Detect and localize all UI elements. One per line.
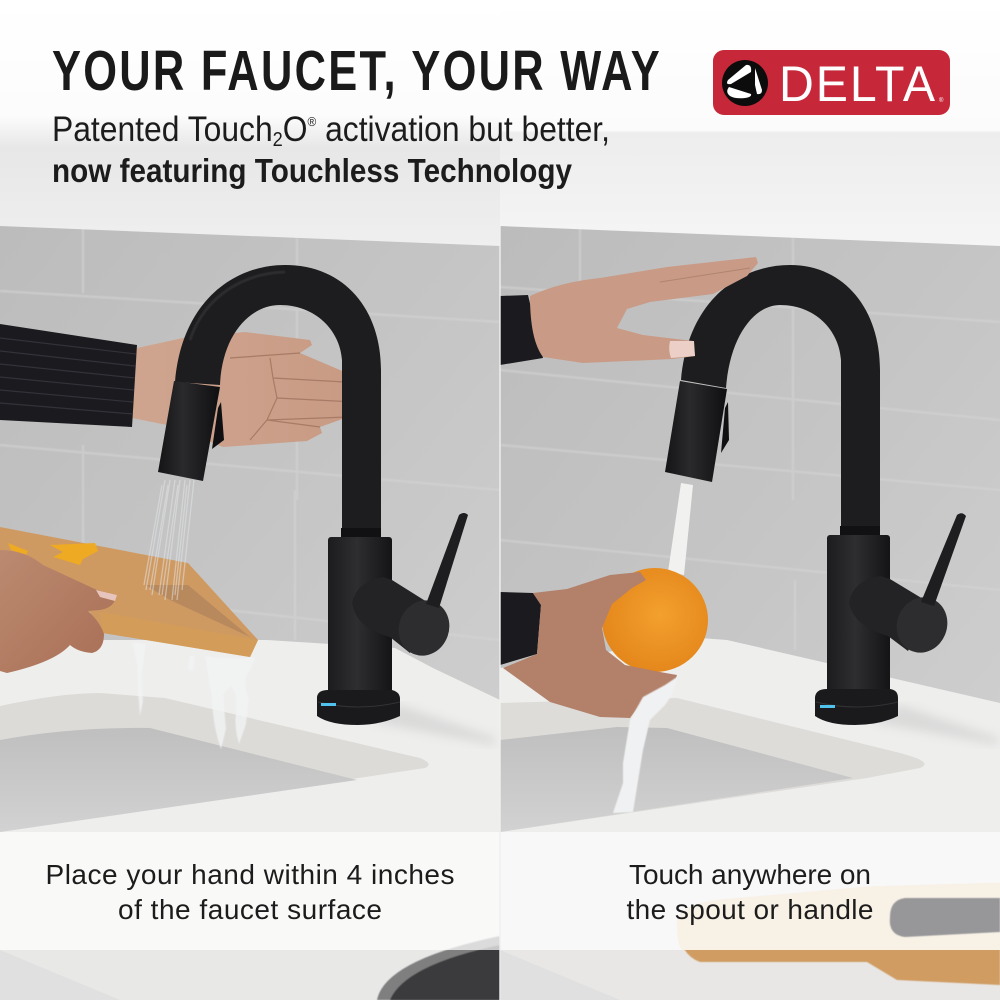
sink basin: [0, 728, 357, 832]
water drips: [132, 642, 255, 749]
base disk: [815, 689, 898, 725]
spray head: [158, 381, 220, 481]
water falling from orange: [613, 677, 677, 813]
counter: [0, 640, 500, 840]
caption band: [0, 832, 1000, 950]
spout: [175, 265, 381, 537]
faucet body: [827, 535, 890, 693]
subtitle: Patented Touch: [52, 110, 295, 149]
sink rim: [500, 698, 924, 832]
lower hand holding orange: [500, 572, 677, 718]
nail: [96, 590, 117, 601]
faucet base shadow: [870, 705, 998, 745]
finger creases: [230, 353, 355, 440]
sink basin: [500, 727, 853, 832]
title: YOUR FAUCET, YOUR WAY: [52, 39, 662, 103]
subtitle: now featuring Touchless Technology: [52, 152, 573, 189]
sleeve: [0, 324, 137, 427]
base disk: [317, 690, 400, 725]
faucet neck collar: [341, 528, 381, 538]
subtitle: O: [283, 110, 308, 149]
faucet right: [665, 265, 966, 725]
spray head: [665, 381, 727, 482]
orange: [602, 568, 708, 672]
right water stream: [668, 483, 693, 575]
lever handle: [352, 577, 435, 653]
left hand with sleeve: [0, 324, 359, 447]
lever handle: [849, 576, 933, 651]
blurred board: [677, 883, 1000, 985]
caption: left: of the faucet surface: [118, 894, 382, 925]
header band: [0, 0, 1000, 246]
subtitle: [52, 110, 610, 189]
subtitle: activation but better,: [316, 110, 610, 149]
sink rim: [0, 693, 429, 832]
upper hand touching spout: [500, 257, 758, 365]
subtitle: ®: [308, 114, 317, 129]
bottom scene: [0, 832, 1000, 1000]
pan: [377, 936, 500, 1000]
logo: Delta: ®: [939, 97, 944, 104]
wrist and palm: [132, 332, 359, 447]
counter: [500, 638, 1000, 840]
logo: Delta: [713, 50, 950, 115]
faucet base shadow: [370, 705, 495, 745]
caption: left: Place your hand within 4 inches: [46, 859, 454, 890]
cutting board: [0, 527, 258, 657]
panel divider: [499, 226, 501, 1000]
holding hand left: [0, 550, 117, 673]
panel: left scene: [0, 226, 500, 840]
faucet neck collar: [840, 526, 880, 536]
panel: right scene: [500, 226, 1000, 840]
caption: right: [626, 859, 874, 925]
wordmark: DELTA: [779, 56, 937, 112]
faucet body: [328, 537, 392, 695]
caption: right: Touch anywhere on: [629, 859, 871, 890]
caption: left: [46, 859, 454, 925]
subtitle: 2: [273, 129, 283, 151]
faucet left: [158, 265, 468, 725]
caption: right: the spout or handle: [626, 894, 874, 925]
water spray on board: [144, 480, 194, 600]
knife handle: [890, 898, 1000, 937]
icon: delta emblem: [722, 60, 768, 106]
